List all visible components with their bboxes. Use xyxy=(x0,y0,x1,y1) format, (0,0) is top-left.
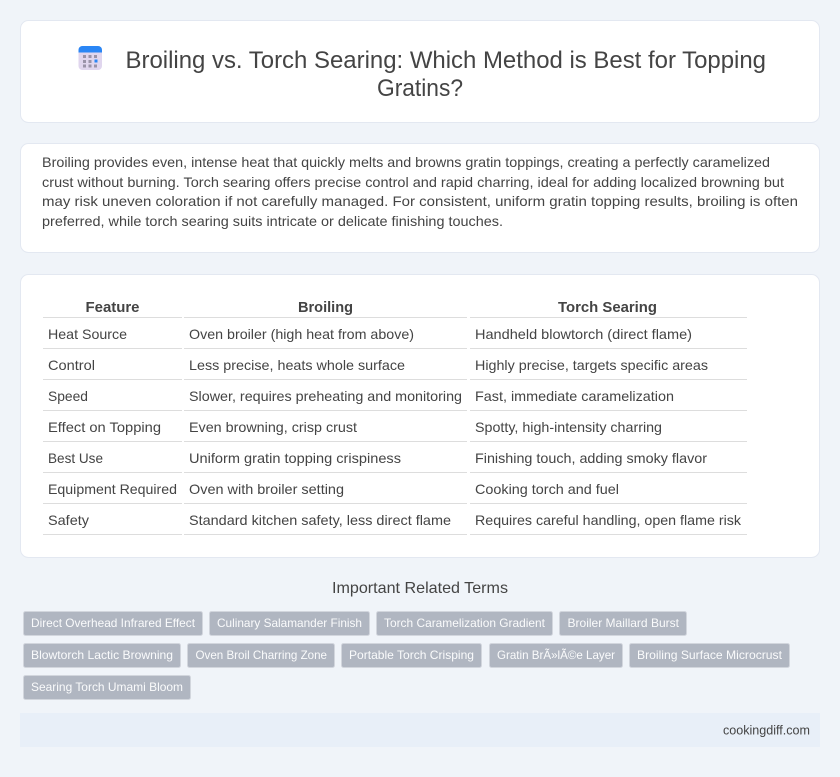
table header xyxy=(86,300,657,316)
row: equipment required xyxy=(48,481,619,497)
row: best use xyxy=(48,450,707,466)
intro text: may risk uneven coloration if not carefully managed. For consistent, uniform gratin topping results, broiling is often xyxy=(42,193,798,209)
row: effect on topping: Effect on Topping xyxy=(48,419,161,435)
row: effect on topping: Spotty, high-intensity charring xyxy=(475,419,662,435)
panel: intro xyxy=(20,144,820,252)
intro text: crust without burning. Torch searing offers precise control and rapid charring, ideal for adding localized browning but xyxy=(42,174,784,190)
table rules xyxy=(43,318,747,534)
tags: related terms: Portable Torch Crisping xyxy=(349,648,474,662)
table header: Broiling xyxy=(298,300,353,316)
table header: Torch Searing xyxy=(558,300,657,316)
tags: related terms: Blowtorch Lactic Browning xyxy=(31,648,173,662)
intro text: Broiling provides even, intense heat that quickly melts and browns gratin toppings, creating a perfectly caramelized xyxy=(42,154,770,170)
tags: related terms: Torch Caramelization Gradient xyxy=(384,616,546,630)
row: speed xyxy=(48,388,674,404)
row: equipment required: Oven with broiler setting xyxy=(189,481,344,497)
tags: related terms: Gratin BrÃ»lÃ©e Layer xyxy=(497,648,615,662)
tags: related terms: Culinary Salamander Finish xyxy=(217,616,362,630)
heading: related terms: Important Related Terms xyxy=(332,580,508,597)
row: heat source: Oven broiler (high heat from above) xyxy=(189,326,414,342)
row: heat source: Handheld blowtorch (direct flame) xyxy=(475,326,692,342)
footer xyxy=(20,713,820,747)
tags: related terms: Searing Torch Umami Bloom xyxy=(31,680,183,694)
row: equipment required: Cooking torch and fuel xyxy=(475,481,619,497)
tags: related terms: Broiling Surface Microcrust xyxy=(637,648,783,662)
tags: related terms: Oven Broil Charring Zone xyxy=(196,648,327,662)
intro text: preferred, while torch searing suits intricate or delicate finishing touches. xyxy=(42,213,503,229)
row: control: Highly precise, targets specific areas xyxy=(475,357,708,373)
icon: calendar xyxy=(78,46,102,70)
panel: header xyxy=(20,20,820,122)
title xyxy=(126,47,766,102)
title: Gratins? xyxy=(377,75,463,102)
table header: Feature xyxy=(86,300,140,316)
row: control xyxy=(48,357,708,373)
row: speed: Slower, requires preheating and monitoring xyxy=(189,388,462,404)
row: best use: Finishing touch, adding smoky flavor xyxy=(475,450,707,466)
row: heat source: Heat Source xyxy=(48,326,127,342)
panel: comparison table xyxy=(20,274,820,558)
row: control: Less precise, heats whole surface xyxy=(189,357,405,373)
row: safety: Requires careful handling, open flame risk xyxy=(475,512,742,528)
row: best use: Uniform gratin topping crispiness xyxy=(189,450,401,466)
row: control: Control xyxy=(48,357,95,373)
row: safety xyxy=(48,512,742,528)
tags: related terms xyxy=(24,612,790,700)
row: heat source xyxy=(48,326,692,342)
row: safety: Standard kitchen safety, less direct flame xyxy=(189,512,451,528)
row: effect on topping xyxy=(48,419,662,435)
title: Broiling vs. Torch Searing: Which Method is Best for Topping xyxy=(126,47,766,74)
tags: related terms: Direct Overhead Infrared Effect xyxy=(31,616,196,630)
row: effect on topping: Even browning, crisp crust xyxy=(189,419,357,435)
intro text xyxy=(42,154,798,229)
row: speed: Speed xyxy=(48,388,88,404)
footer text: cookingdiff.com xyxy=(723,722,810,738)
tags: related terms: Broiler Maillard Burst xyxy=(568,616,680,630)
row: speed: Fast, immediate caramelization xyxy=(475,388,674,404)
row: equipment required: Equipment Required xyxy=(48,481,177,497)
row: best use: Best Use xyxy=(48,450,103,466)
row: safety: Safety xyxy=(48,512,89,528)
